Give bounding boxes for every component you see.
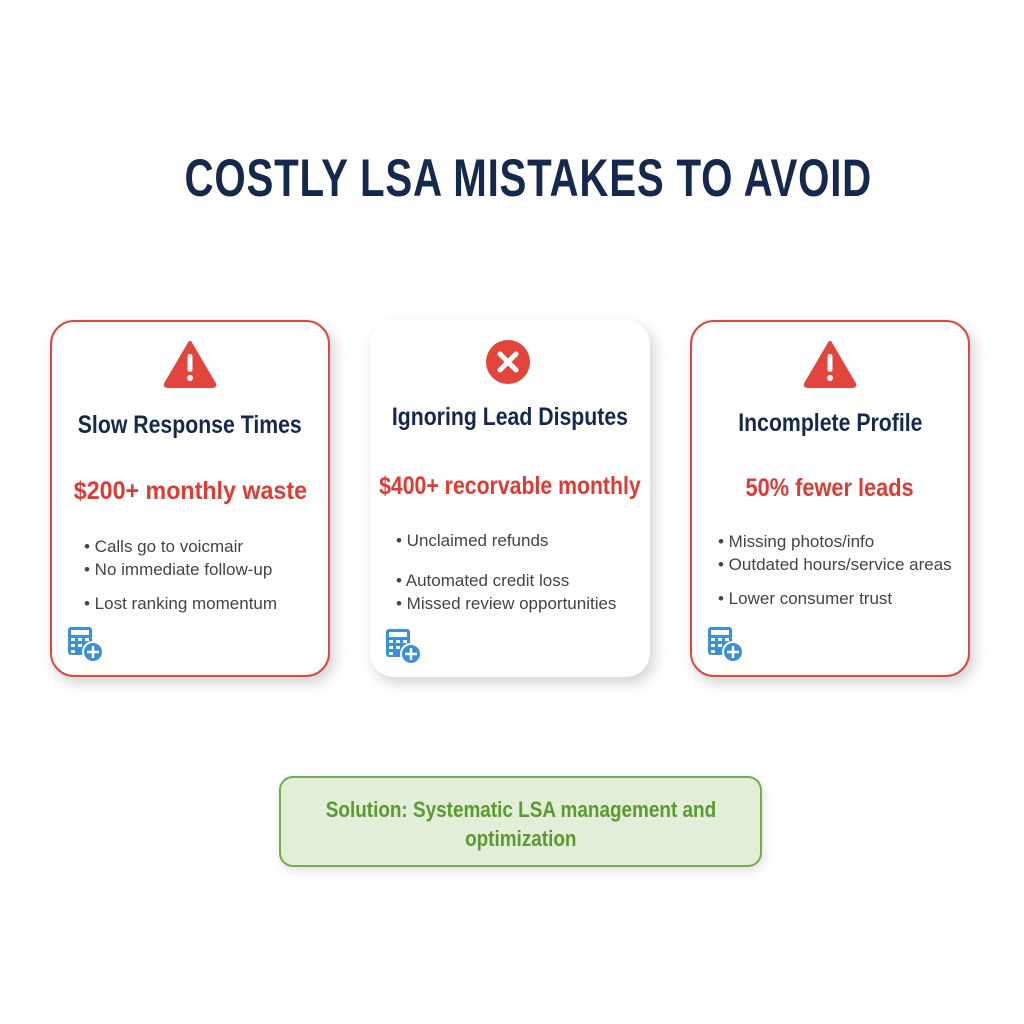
cost: $400+ recorvable monthly <box>379 472 641 500</box>
bullets: • Lower consumer trust <box>718 589 892 608</box>
bullets: • Missing photos/info <box>718 532 874 551</box>
icon: x circle <box>486 340 530 384</box>
panel: incomplete profile <box>690 320 970 677</box>
icon: warning <box>804 340 856 388</box>
bullets <box>718 532 952 608</box>
bullets: • Lost ranking momentum <box>84 594 277 613</box>
bullets: • Automated credit loss <box>396 571 569 590</box>
callout: solution <box>279 776 762 867</box>
icon: calculator <box>708 627 742 661</box>
heading: Slow Response Times <box>78 411 302 439</box>
cost: 50% fewer leads <box>746 474 914 502</box>
icon: calculator <box>68 627 102 661</box>
bullets: • Outdated hours/service areas <box>718 555 952 574</box>
bullets: • Missed review opportunities <box>396 594 616 613</box>
callout: solution: optimization <box>465 826 576 851</box>
bullets: • No immediate follow-up <box>84 560 272 579</box>
heading: Ignoring Lead Disputes <box>392 403 628 431</box>
bullets: • Unclaimed refunds <box>396 531 548 550</box>
bullets <box>84 537 277 613</box>
callout: solution: Solution: Systematic LSA management and <box>325 797 716 822</box>
bullets: • Calls go to voicmair <box>84 537 243 556</box>
title: COSTLY LSA MISTAKES TO AVOID <box>184 149 872 208</box>
panel: ignoring lead disputes <box>370 320 650 677</box>
panel: slow response times <box>50 320 330 677</box>
icon: calculator <box>386 629 420 663</box>
heading: Incomplete Profile <box>738 409 922 437</box>
bullets <box>396 531 616 613</box>
cost: $200+ monthly waste <box>73 477 307 505</box>
icon: warning <box>164 340 216 388</box>
